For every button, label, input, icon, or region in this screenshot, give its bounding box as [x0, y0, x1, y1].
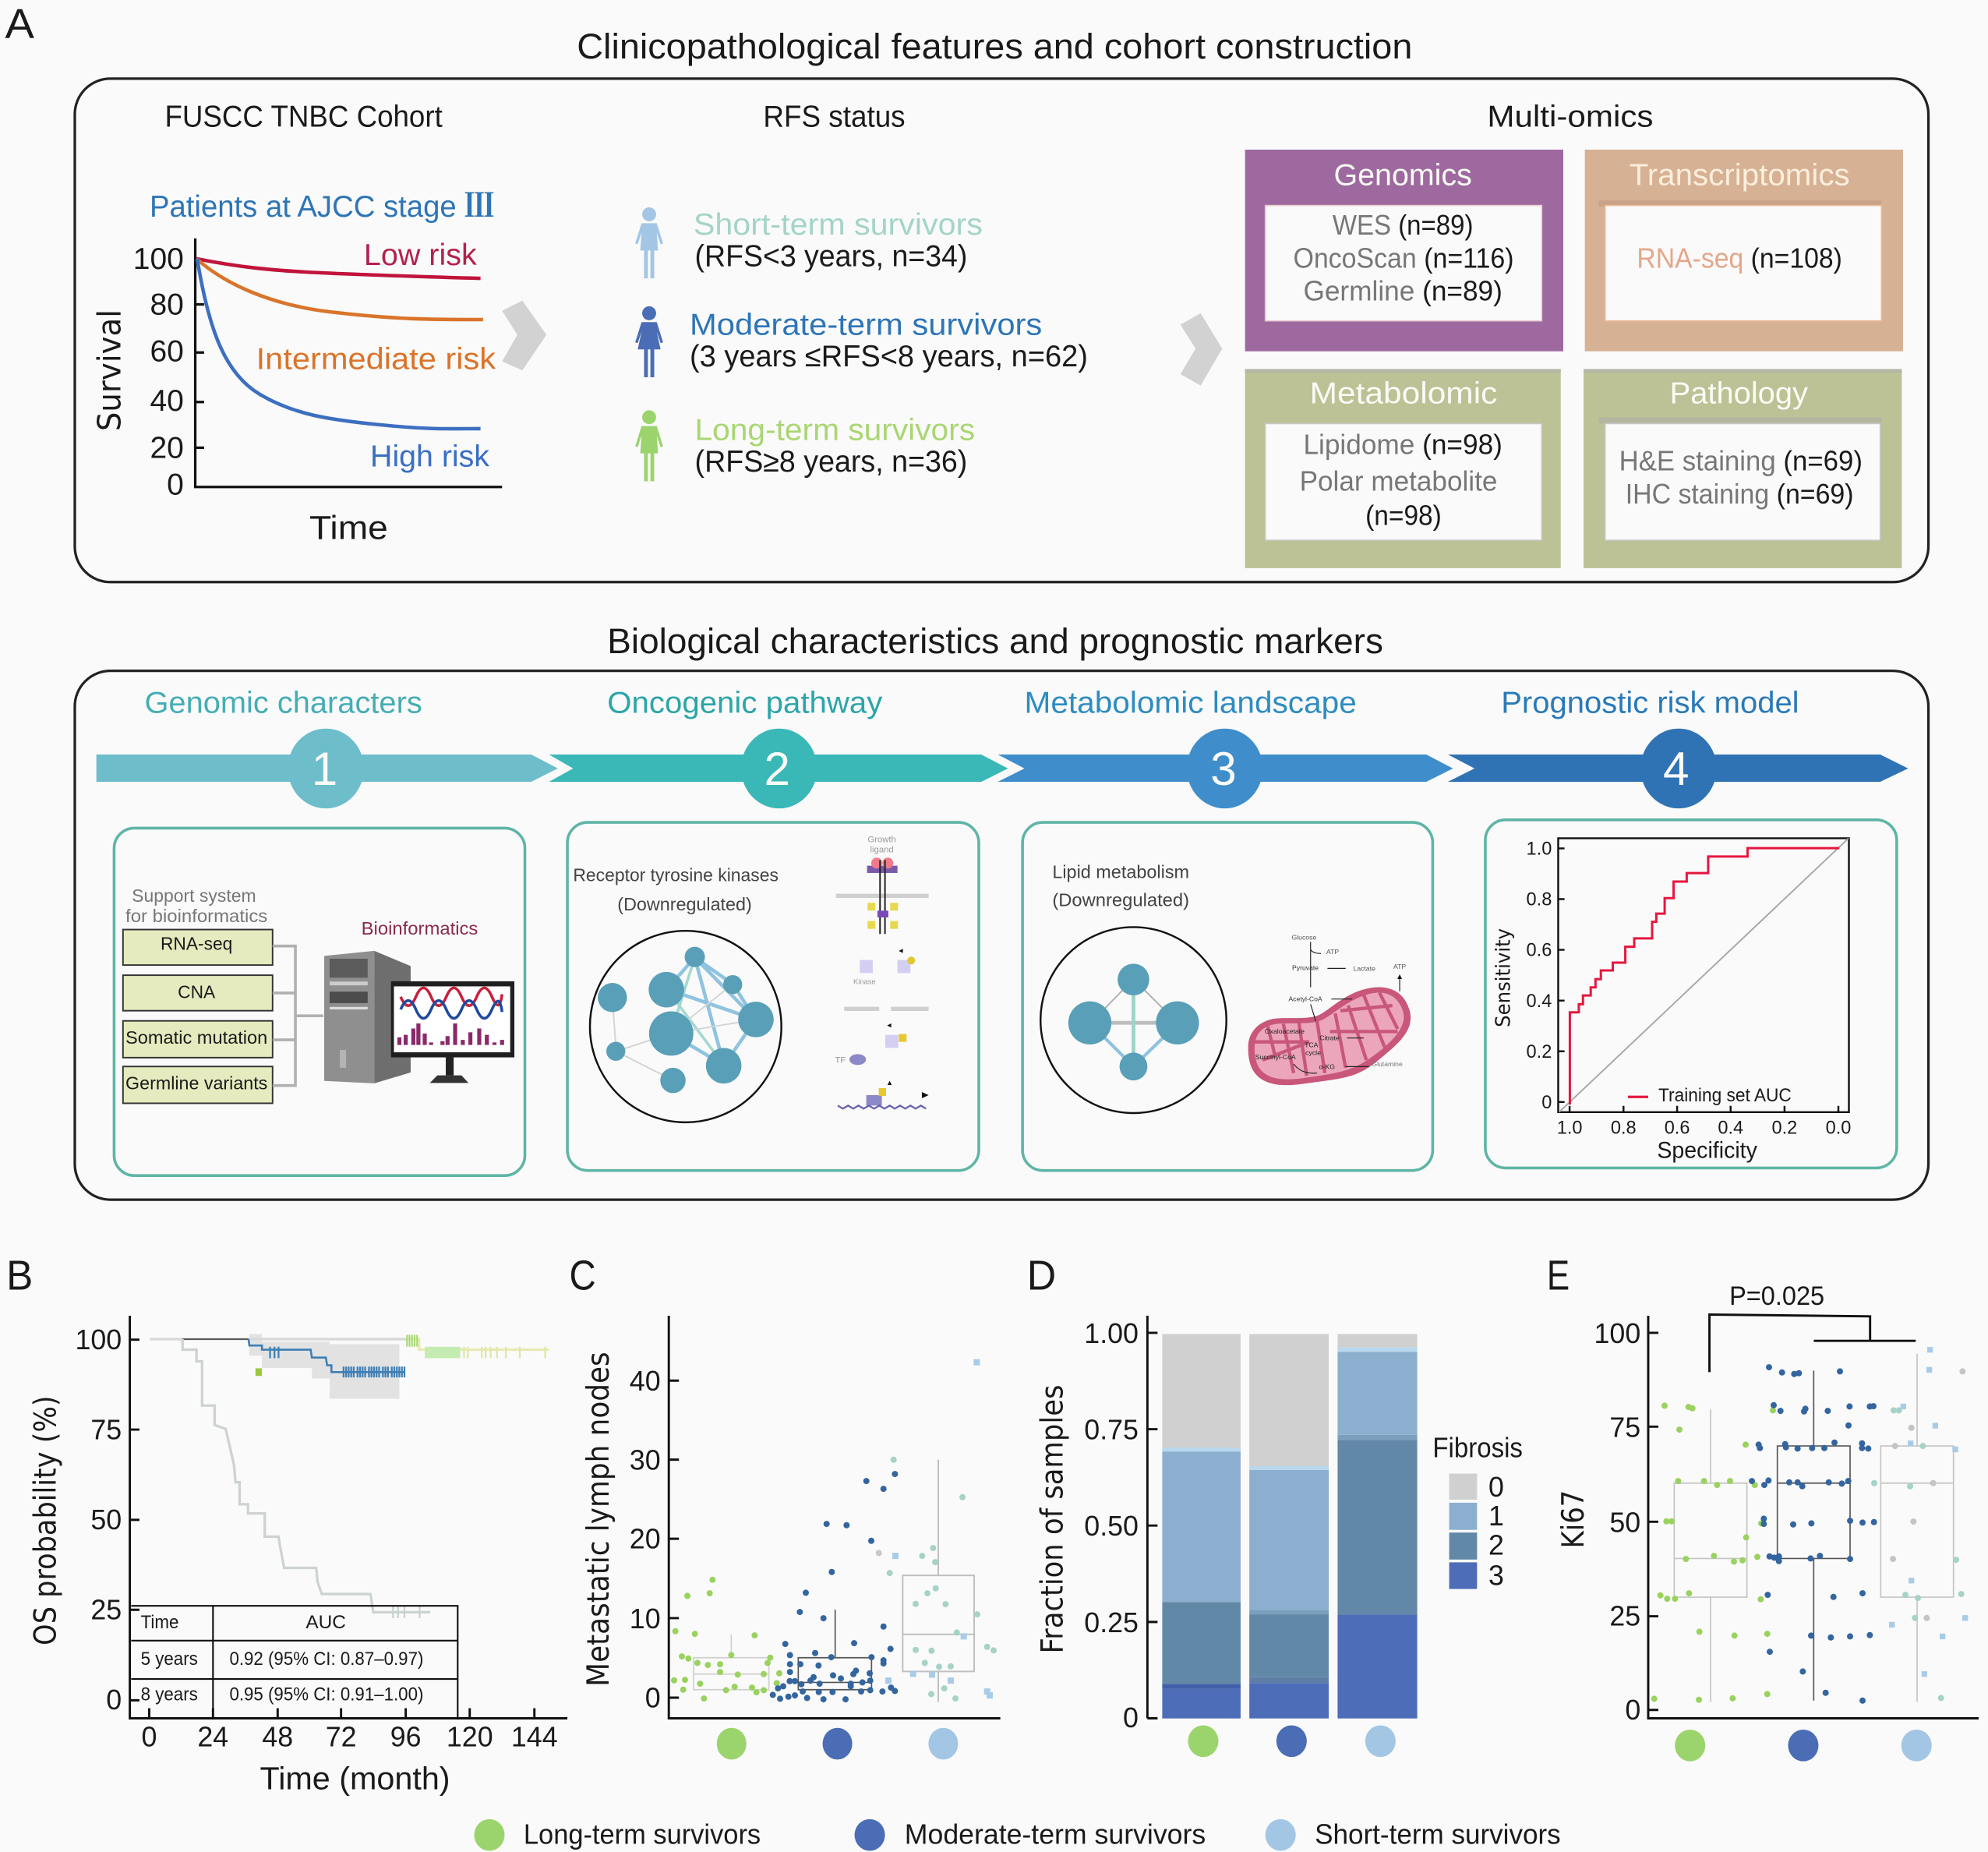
AUC table: AUC	[305, 1612, 346, 1633]
tick labels: 30	[630, 1445, 661, 1476]
axis labels: OS probability (%)	[29, 1395, 64, 1645]
x tick labels: 0	[142, 1721, 157, 1752]
short-term points	[890, 1460, 994, 1698]
short-term teal points	[1874, 1410, 1962, 1698]
heading: FUSCC TNBC Cohort: FUSCC TNBC Cohort	[164, 101, 443, 134]
short-term box	[1880, 1354, 1954, 1702]
panel: Pathology: Pathology	[1670, 376, 1808, 410]
long-term box	[1674, 1409, 1747, 1702]
heading: RFS status: RFS status	[763, 101, 906, 134]
x tick labels	[142, 1721, 558, 1752]
data type labels	[125, 934, 267, 1094]
ROC tick labels: 0.4	[1527, 991, 1552, 1011]
data type labels: Somatic mutation	[125, 1027, 267, 1048]
x tick labels: 144	[511, 1721, 558, 1752]
title: clinicopathological features: Clinicopathological features and cohort construction	[577, 27, 1412, 66]
chart: B overall survival	[29, 1316, 567, 1797]
step 2 arrow and badge	[549, 729, 1008, 808]
confidence bands	[249, 1334, 399, 1399]
panel: Metabolomic	[1245, 369, 1561, 568]
chart subtitle: Patients at AJCC stage	[150, 190, 457, 224]
moderate-term censor ticks	[270, 1347, 404, 1377]
panel label C: C	[569, 1253, 596, 1299]
ROC tick labels: 0.2	[1527, 1041, 1552, 1062]
legend: moderate-term: Moderate-term survivors	[905, 1819, 1206, 1850]
tick labels: 75	[1609, 1412, 1640, 1443]
step 2 arrow and badge: 2	[764, 743, 790, 795]
tick labels: 50	[1609, 1507, 1640, 1538]
axes	[669, 1316, 1001, 1718]
bar: long-term	[1162, 1334, 1241, 1719]
long-term text: (RFS≥8 years, n=36)	[695, 445, 967, 479]
axis label: Metastatic lymph nodes	[581, 1352, 616, 1687]
heading: Multi-omics: Multi-omics	[1487, 101, 1653, 134]
y tick labels: 60	[150, 335, 184, 369]
outlier marker	[256, 1368, 262, 1376]
y tick labels: 0	[106, 1684, 122, 1716]
fibrosis legend: 3	[1488, 1560, 1504, 1592]
ROC tick labels: 1.0	[1557, 1117, 1583, 1137]
ROC diagonal	[1559, 838, 1849, 1112]
RFS status groups	[635, 207, 1088, 481]
support system caption	[125, 885, 267, 926]
receptor signalling diagram: ligand	[870, 845, 894, 854]
tick labels: 0.25	[1084, 1607, 1139, 1638]
scatter and boxes	[674, 1362, 994, 1702]
moderate-term text: (3 years ≤RFS<8 years, n=62)	[690, 340, 1088, 373]
y tick labels: 0	[167, 468, 184, 502]
AUC table: Time	[141, 1612, 178, 1633]
significance bracket: P=0.025	[1729, 1281, 1824, 1311]
y tick labels: 100	[133, 242, 184, 276]
support system caption: Support system	[132, 885, 256, 906]
data type labels: Germline variants	[125, 1073, 267, 1094]
ROC axis labels	[1492, 928, 1757, 1163]
panel label E: E	[1547, 1253, 1570, 1299]
ROC curve	[1570, 848, 1839, 1104]
long-term curve	[407, 1339, 549, 1350]
genomics list	[1293, 210, 1514, 307]
x axis label: Time	[309, 509, 388, 546]
scatter and boxes	[1654, 1350, 1965, 1702]
lipid network	[1040, 927, 1227, 1113]
y tick labels	[133, 242, 184, 502]
panel label D: D	[1027, 1253, 1056, 1299]
axes	[129, 1316, 567, 1718]
genomics list: OncoScan (n=116)	[1293, 242, 1514, 274]
panel: cohort construction frame	[75, 79, 1929, 582]
ROC tick labels: 0.6	[1527, 940, 1552, 960]
step 1 arrow and badge: 1	[312, 743, 337, 795]
ROC tick labels: 0.6	[1665, 1117, 1690, 1137]
x tick labels: 72	[326, 1721, 357, 1752]
short-term text: (RFS<3 years, n=34)	[695, 240, 967, 274]
moderate-term text	[690, 309, 1088, 373]
group key dots	[1675, 1730, 1932, 1762]
data type labels: CNA	[178, 981, 216, 1002]
ROC tick labels	[1527, 839, 1851, 1137]
y tick labels: 25	[90, 1595, 122, 1626]
panel label A: A	[5, 1, 34, 48]
moderate-term box	[1778, 1370, 1850, 1701]
legend: long-term: Long-term survivors	[524, 1819, 761, 1850]
chart subtitle	[150, 179, 494, 227]
lipid caption	[1052, 862, 1189, 910]
network diagram	[590, 931, 782, 1122]
tick labels	[1084, 1318, 1139, 1734]
receptor signalling diagram: Kinase	[853, 978, 876, 986]
arrow: chevron 2	[1181, 313, 1222, 386]
AUC table	[131, 1606, 457, 1719]
y tick labels: 80	[150, 288, 184, 322]
short-term box	[902, 1460, 974, 1702]
x tick labels: 96	[390, 1721, 422, 1752]
metabolomic list	[1300, 429, 1502, 532]
curve labels: Intermediate risk	[256, 342, 496, 376]
receptor signalling diagram: TF	[835, 1055, 846, 1065]
panel: oncogenic pathway	[567, 822, 979, 1171]
AUC table: 0.95 (95% CI: 0.91–1.00)	[229, 1684, 423, 1705]
ROC tick labels: 0.8	[1527, 889, 1552, 910]
moderate-term text: Moderate-term survivors	[690, 309, 1042, 342]
mitochondrion diagram: α-KG	[1319, 1062, 1335, 1070]
long-term text	[695, 414, 975, 479]
tick labels: 20	[630, 1523, 661, 1554]
panel: prognostic risk model	[1485, 820, 1897, 1168]
long-term points	[674, 1580, 779, 1698]
mitochondrion diagram: Citrate	[1319, 1034, 1340, 1042]
moderate-term points	[1752, 1367, 1874, 1701]
chart: risk survival curves	[91, 179, 502, 546]
tick labels: 0	[645, 1683, 661, 1714]
y tick labels	[75, 1324, 122, 1716]
icon: long-term survivor	[635, 410, 663, 481]
fibrosis legend: 2	[1488, 1530, 1504, 1561]
axes	[196, 239, 502, 487]
short-term text: Short-term survivors	[694, 208, 983, 242]
short-term censor ticks	[393, 1606, 420, 1618]
chart subtitle: Ⅲ	[464, 179, 494, 227]
x tick labels: 120	[447, 1721, 493, 1752]
ROC tick labels: 0.8	[1611, 1117, 1637, 1137]
network caption: (Downregulated)	[617, 894, 752, 914]
metabolomic list: Polar metabolite	[1300, 466, 1497, 497]
ROC tick labels: 0	[1541, 1092, 1552, 1112]
chart: E Ki67	[1556, 1281, 1979, 1762]
transcriptomics list: RNA-seq (n=108)	[1637, 242, 1842, 274]
fibrosis legend: 1	[1488, 1500, 1504, 1532]
ROC axis labels: Sensitivity	[1492, 928, 1516, 1027]
title: biological characteristics: Biological characteristics and prognostic markers	[607, 621, 1383, 661]
mitochondrion diagram: ATP	[1326, 948, 1339, 956]
moderate-term points	[773, 1474, 895, 1699]
ROC tick labels: 1.0	[1527, 839, 1552, 859]
fibrosis legend: 0	[1488, 1472, 1504, 1503]
step 4 arrow and badge: 4	[1663, 743, 1690, 795]
lipid caption: Lipid metabolism	[1052, 862, 1189, 882]
step headings: Oncogenic pathway	[607, 686, 883, 719]
bar: moderate-term	[1249, 1334, 1329, 1719]
short-term light blue points	[1892, 1350, 1965, 1674]
moderate-term curve	[249, 1339, 405, 1372]
curve labels: Low risk	[364, 239, 477, 272]
baseline	[150, 1338, 407, 1340]
mitochondrion diagram: Pyruvate	[1292, 964, 1319, 972]
network caption: Receptor tyrosine kinases	[573, 865, 779, 885]
ROC tick labels: 0.2	[1771, 1117, 1797, 1137]
x tick labels: 48	[262, 1721, 293, 1752]
bar: short-term	[1337, 1334, 1418, 1719]
axis label: Fraction of samples	[1035, 1385, 1070, 1654]
axes	[1147, 1316, 1157, 1718]
tick labels	[1594, 1318, 1640, 1726]
tick labels: 0	[1625, 1695, 1640, 1726]
panel: metabolomic landscape	[1022, 822, 1432, 1171]
panel: Transcriptomics	[1585, 150, 1903, 352]
bioinformatics caption: Bioinformatics	[362, 918, 478, 938]
low risk curve	[196, 259, 481, 278]
ROC axis labels: Specificity	[1657, 1137, 1757, 1163]
high risk curve	[197, 259, 481, 429]
axis labels: Time (month)	[260, 1761, 450, 1797]
step 3 arrow and badge	[998, 729, 1453, 808]
x tick labels: 24	[197, 1721, 228, 1752]
mitochondrion diagram: Glutamine	[1372, 1060, 1403, 1068]
moderate-term box	[798, 1610, 871, 1690]
icon: moderate-term survivor	[635, 306, 663, 377]
curve labels	[256, 239, 496, 474]
y axis label: Survival	[91, 309, 129, 431]
tick labels: 0.50	[1084, 1511, 1139, 1542]
mitochondrion diagram	[1248, 933, 1411, 1085]
long-term censor ticks	[425, 1347, 461, 1358]
step 4 arrow and badge	[1448, 729, 1909, 808]
AUC table: 8 years	[141, 1684, 198, 1705]
panel: Transcriptomics: Transcriptomics	[1630, 159, 1850, 193]
y tick labels: 20	[150, 431, 184, 465]
ROC frame and ticks	[1558, 838, 1849, 1112]
support system caption: for bioinformatics	[125, 906, 267, 926]
receptor signalling diagram	[835, 836, 929, 1108]
legend: short-term: Short-term survivors	[1315, 1819, 1561, 1850]
short-term curve	[182, 1339, 430, 1612]
group key dots	[717, 1728, 958, 1759]
receptor signalling diagram: Growth	[867, 836, 896, 845]
mitochondrion diagram: ATP	[1393, 963, 1406, 970]
metabolomic list: Lipidome (n=98)	[1303, 429, 1502, 460]
group key dots	[1188, 1725, 1396, 1757]
icon: computer tower	[324, 951, 411, 1083]
step headings: Prognostic risk model	[1501, 686, 1799, 719]
panel: Metabolomic: Metabolomic	[1310, 376, 1497, 410]
tick labels: 0.75	[1084, 1415, 1139, 1446]
AUC table: 5 years	[141, 1649, 198, 1670]
ROC legend: Training set AUC	[1658, 1085, 1792, 1105]
ROC tick labels: 0.0	[1826, 1117, 1851, 1137]
mitochondrion diagram: TCA	[1305, 1041, 1319, 1048]
y tick labels: 40	[150, 384, 184, 418]
tick labels: 100	[1594, 1318, 1640, 1349]
lipid caption: (Downregulated)	[1052, 890, 1189, 910]
panel: Pathology	[1584, 369, 1901, 568]
intermediate risk curve	[196, 259, 483, 320]
genomics list: Germline (n=89)	[1303, 276, 1502, 307]
arrow: chevron 1	[502, 301, 546, 370]
chart: D fibrosis stacked bars	[1035, 1316, 1523, 1757]
connector arrow	[273, 946, 323, 1086]
pathology list: IHC staining (n=69)	[1626, 479, 1854, 510]
y tick labels: 75	[90, 1415, 122, 1446]
mitochondrion diagram: Succinyl-CoA	[1255, 1053, 1296, 1061]
step 1 arrow and badge	[97, 729, 558, 808]
step headings: Metabolomic landscape	[1025, 686, 1357, 719]
chart: C metastatic lymph nodes	[581, 1316, 1001, 1759]
AUC table: 0.92 (95% CI: 0.87–0.97)	[229, 1649, 423, 1670]
fibrosis legend	[1432, 1432, 1523, 1592]
panel label B: B	[6, 1253, 33, 1299]
short-term light blue points	[888, 1362, 990, 1695]
icon: monitor with DNA and bars	[391, 981, 514, 1083]
panel: Genomics: Genomics	[1334, 159, 1472, 193]
data type labels: RNA-seq	[161, 934, 232, 954]
step headings	[144, 686, 1799, 719]
axes	[1648, 1316, 1979, 1718]
metabolomic list: (n=98)	[1365, 500, 1442, 532]
tick labels: 25	[1609, 1601, 1640, 1632]
y tick labels: 100	[75, 1324, 122, 1355]
panel: genomic characters	[114, 828, 525, 1175]
long-term text: Long-term survivors	[695, 414, 975, 447]
short-term text	[694, 208, 983, 274]
axis labels	[29, 1395, 450, 1797]
data type boxes	[123, 930, 273, 1103]
mitochondrion diagram: Lactate	[1354, 964, 1375, 972]
long-term points	[1654, 1405, 1773, 1700]
curve labels: High risk	[370, 440, 489, 474]
mitochondrion diagram: Glucose	[1292, 933, 1316, 941]
ROC tick labels: 0.4	[1718, 1117, 1743, 1137]
short-term grey points	[1893, 1371, 1962, 1618]
mitochondrion diagram: Oxaloacetate	[1265, 1027, 1305, 1035]
mitochondrion diagram: cycle	[1305, 1048, 1321, 1056]
step headings: Genomic characters	[144, 686, 422, 719]
pathology list: H&E staining (n=69)	[1619, 446, 1863, 477]
tick labels	[630, 1366, 661, 1714]
tick labels: 40	[630, 1366, 661, 1397]
panel: Genomics	[1245, 150, 1563, 352]
tick labels: 0	[1123, 1702, 1139, 1734]
bottom legend	[474, 1819, 1561, 1851]
network caption	[573, 865, 779, 914]
tick labels: 1.00	[1084, 1318, 1139, 1349]
y tick labels: 50	[90, 1504, 122, 1536]
step 3 arrow and badge: 3	[1210, 743, 1237, 795]
genomics list: WES (n=89)	[1333, 210, 1473, 241]
tick labels: 10	[630, 1603, 661, 1635]
significance bracket	[1710, 1281, 1916, 1372]
panel: biological characteristics frame	[75, 671, 1929, 1200]
pathology list	[1619, 446, 1863, 510]
icon: short-term survivor	[635, 207, 663, 278]
long-term box	[694, 1635, 769, 1690]
mitochondrion diagram: Acetyl-CoA	[1288, 995, 1322, 1003]
fibrosis legend: Fibrosis	[1432, 1432, 1523, 1463]
axis label: Ki67	[1556, 1490, 1591, 1548]
